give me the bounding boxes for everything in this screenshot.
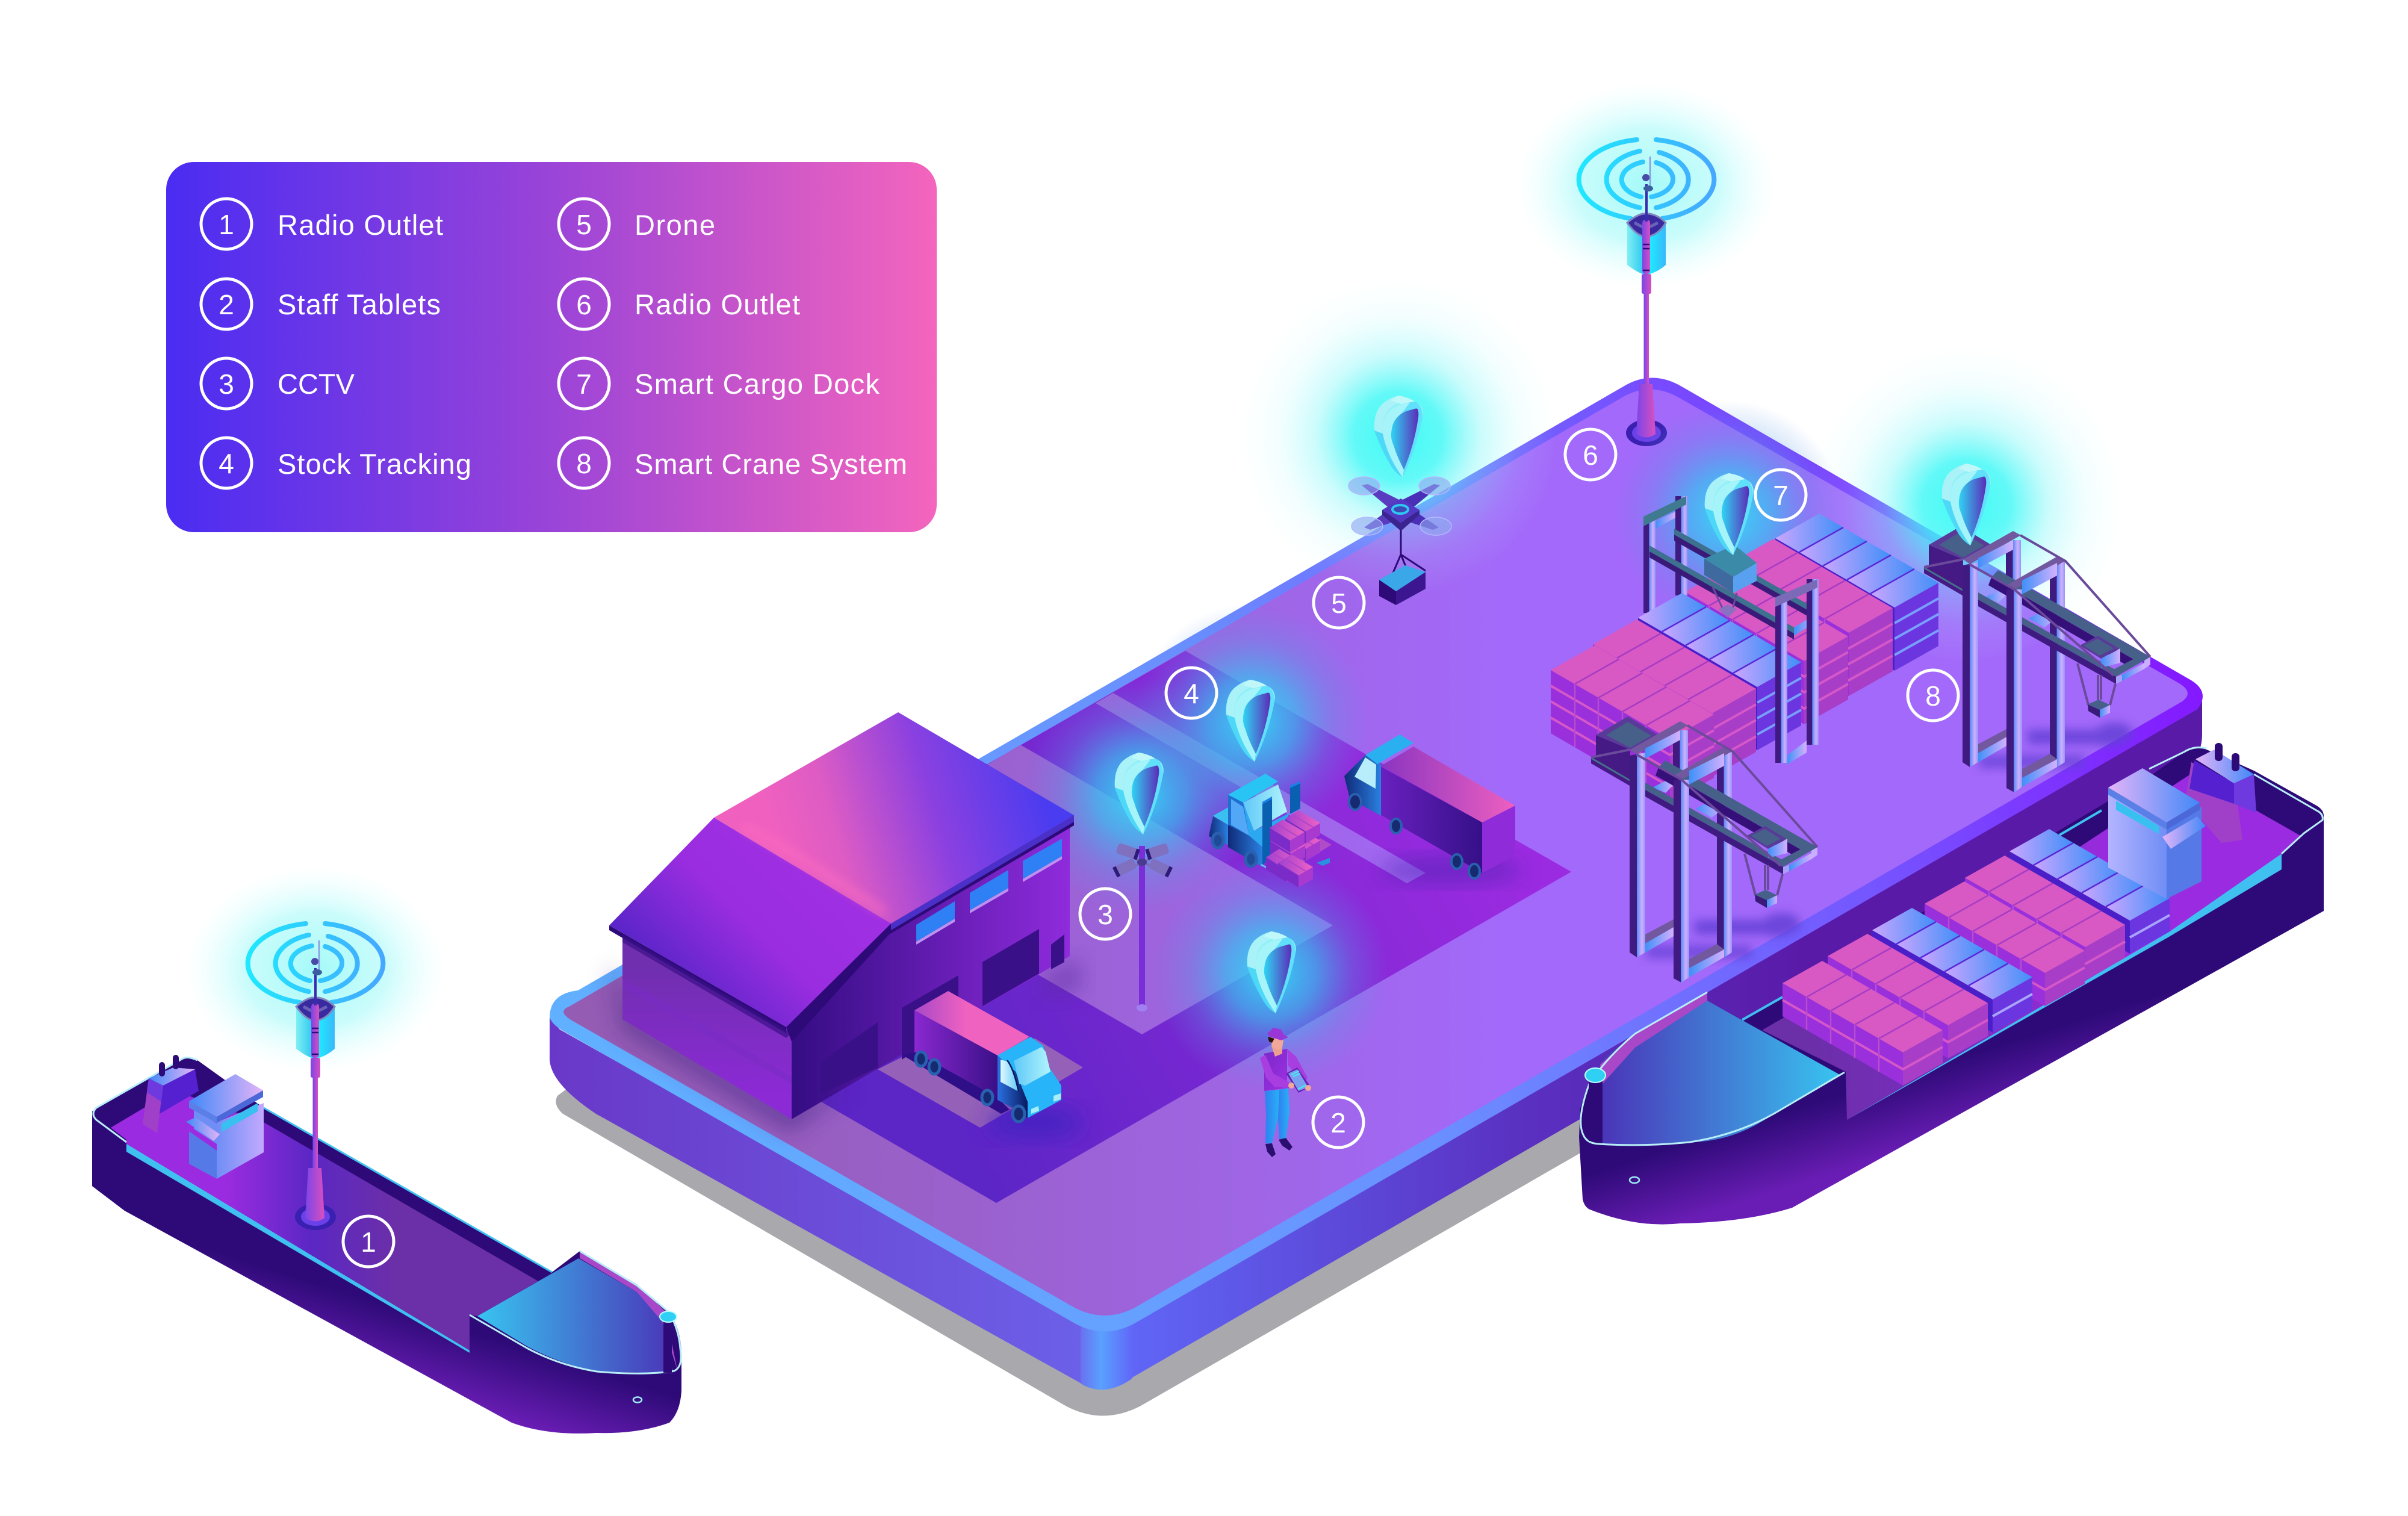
legend item 4 (201, 438, 471, 488)
legend item 8: 8 (576, 448, 592, 479)
drone package (1379, 580, 1396, 605)
marker 6: 6 (1583, 440, 1598, 471)
near rail (1847, 854, 2282, 1120)
large cargo ship (1579, 743, 2324, 1225)
platform shadow (556, 1072, 1601, 1416)
bridge tower (186, 1074, 264, 1179)
legend item 6 (559, 279, 800, 329)
deck (1762, 774, 2301, 1120)
truck cab (1344, 755, 1381, 816)
pallet (1296, 838, 1332, 863)
pin glows (1022, 277, 2126, 1090)
truck cargo (914, 1010, 998, 1098)
light strip (1096, 693, 1426, 883)
funnel (143, 1055, 199, 1133)
hull (1579, 747, 2324, 1225)
legend item 8 (559, 438, 907, 488)
legend item 3 (201, 358, 355, 409)
marker 7: 7 (1773, 480, 1789, 511)
forklift (1209, 774, 1332, 887)
legend item 4: Stock Tracking (278, 448, 471, 480)
shoes (1265, 1143, 1276, 1157)
legend item 7: Smart Cargo Dock (635, 368, 880, 400)
legend item 7: 7 (576, 368, 592, 400)
truck chassis (903, 1052, 1010, 1114)
ship containers (1783, 829, 2170, 1086)
forklift wheels (1212, 833, 1256, 866)
platform corner (1081, 1322, 1132, 1390)
truck cargo (1379, 766, 1482, 873)
legend item 2: 2 (219, 289, 234, 320)
near rail (126, 1144, 470, 1353)
legend item 1: Radio Outlet (278, 209, 443, 241)
platform side right (1120, 701, 2202, 1385)
drone cable (1387, 530, 1426, 587)
truck cab (998, 1037, 1061, 1118)
legend item 5 (559, 199, 715, 249)
legend panel (166, 162, 937, 532)
drone rotors (1348, 477, 1451, 535)
forklift front body (1243, 803, 1290, 847)
loading doors (821, 929, 1064, 1095)
radio outlet 6 (1517, 83, 1776, 446)
marker 3 (1080, 889, 1131, 939)
truck wheels (916, 1052, 993, 1105)
dock gantry rear legs (1643, 496, 1687, 613)
bow rail (1600, 992, 1707, 1084)
location pins (1115, 396, 1991, 1013)
marker 2 (1313, 1097, 1364, 1148)
forklift mast (1262, 781, 1300, 867)
tablet (1286, 1067, 1311, 1093)
far rail (1742, 810, 2102, 1020)
bow deck (1603, 1001, 1840, 1145)
marker 1 (343, 1216, 394, 1267)
rear containers (1775, 514, 1938, 671)
map number markers (343, 429, 1958, 1267)
bow bollard (660, 1311, 677, 1373)
small ship (92, 867, 681, 1434)
radio outlet 1 (186, 867, 445, 1230)
marker 1: 1 (361, 1226, 376, 1258)
legend item 5: Drone (635, 209, 715, 241)
legend item 3: CCTV (278, 368, 355, 400)
staff member with tablet (1260, 1028, 1311, 1157)
forklift lower body (1228, 825, 1262, 867)
hands (1288, 1083, 1294, 1089)
dock trolley (1704, 559, 1733, 593)
legend item 5: 5 (576, 209, 592, 240)
smart cargo dock containers (1551, 496, 1938, 803)
marker 5: 5 (1331, 588, 1347, 619)
CCTV pole (1112, 843, 1173, 1011)
bow outline (1581, 992, 1845, 1145)
front containers (1638, 593, 1801, 750)
legend item 1: 1 (219, 209, 234, 240)
windows (916, 839, 1062, 945)
marker 7 (1755, 470, 1806, 520)
roof eaves (609, 925, 786, 1033)
parking patch (903, 745, 1333, 1034)
bow outline (470, 1251, 681, 1373)
stacked boxes (1266, 810, 1320, 887)
legend item 1 (201, 199, 443, 249)
forklift roof (1228, 774, 1278, 803)
hair (1268, 1037, 1274, 1043)
smart crane B (1924, 526, 2150, 792)
roof ridge highlight (743, 826, 885, 912)
cargo truck (1344, 735, 1523, 883)
legend item 3: 3 (219, 368, 234, 400)
marker 5 (1314, 577, 1364, 628)
dark yard (722, 651, 1571, 1203)
bow bollard (1585, 1068, 1606, 1141)
legend item 8: Smart Crane System (635, 448, 907, 480)
port platform (550, 378, 2203, 1390)
legend item 4: 4 (219, 448, 234, 479)
dock gantry boom and front legs (1649, 529, 1819, 765)
bow deck (477, 1258, 673, 1373)
right wall (792, 825, 1070, 1119)
forklift rear (1209, 816, 1228, 845)
marker 8: 8 (1925, 680, 1941, 712)
marker 4 (1166, 668, 1217, 718)
drone (1348, 477, 1451, 605)
hull trim (2149, 747, 2323, 854)
forklift windshield (1243, 784, 1287, 831)
cap (1267, 1028, 1288, 1040)
legend item 7 (559, 358, 880, 409)
legend item 2: Staff Tablets (278, 288, 441, 320)
left wall (622, 937, 792, 1119)
platform side left (550, 1017, 1084, 1385)
torso (1264, 1049, 1289, 1091)
legend item 6: Radio Outlet (635, 288, 800, 320)
porthole (633, 1397, 642, 1403)
far rail (264, 1108, 552, 1272)
porthole (1630, 1177, 1639, 1183)
hull (92, 1058, 681, 1434)
hull trim (93, 1058, 197, 1142)
marker 6 (1565, 429, 1616, 480)
roof back slope (714, 712, 1074, 924)
deck (111, 1090, 538, 1352)
marker 3: 3 (1097, 899, 1113, 930)
bridge tower (2108, 768, 2206, 899)
bow rail (580, 1251, 677, 1370)
cameras (1112, 843, 1173, 877)
forklift side window (1231, 799, 1249, 836)
truck bay patch (878, 1036, 1083, 1128)
truck wheels (1391, 819, 1480, 878)
building shadow (608, 963, 855, 1132)
delivery truck (903, 991, 1084, 1139)
smart crane A (1591, 716, 1817, 983)
funnel (2185, 743, 2256, 843)
marker 8 (1908, 670, 1958, 721)
drone arms (1362, 484, 1409, 518)
legend item 2 (201, 279, 441, 329)
roof front slope (609, 818, 891, 1027)
platform surface (563, 390, 2188, 1316)
drone body (1382, 510, 1420, 531)
right arm (1287, 1049, 1308, 1084)
marker 2: 2 (1330, 1107, 1346, 1139)
platform rim (550, 378, 2203, 1332)
left arm (1260, 1055, 1289, 1088)
legs (1278, 1088, 1289, 1139)
warehouse (608, 712, 1084, 1132)
legend item 6: 6 (576, 289, 592, 320)
neck and face (1271, 1046, 1282, 1057)
marker 4: 4 (1184, 678, 1199, 709)
